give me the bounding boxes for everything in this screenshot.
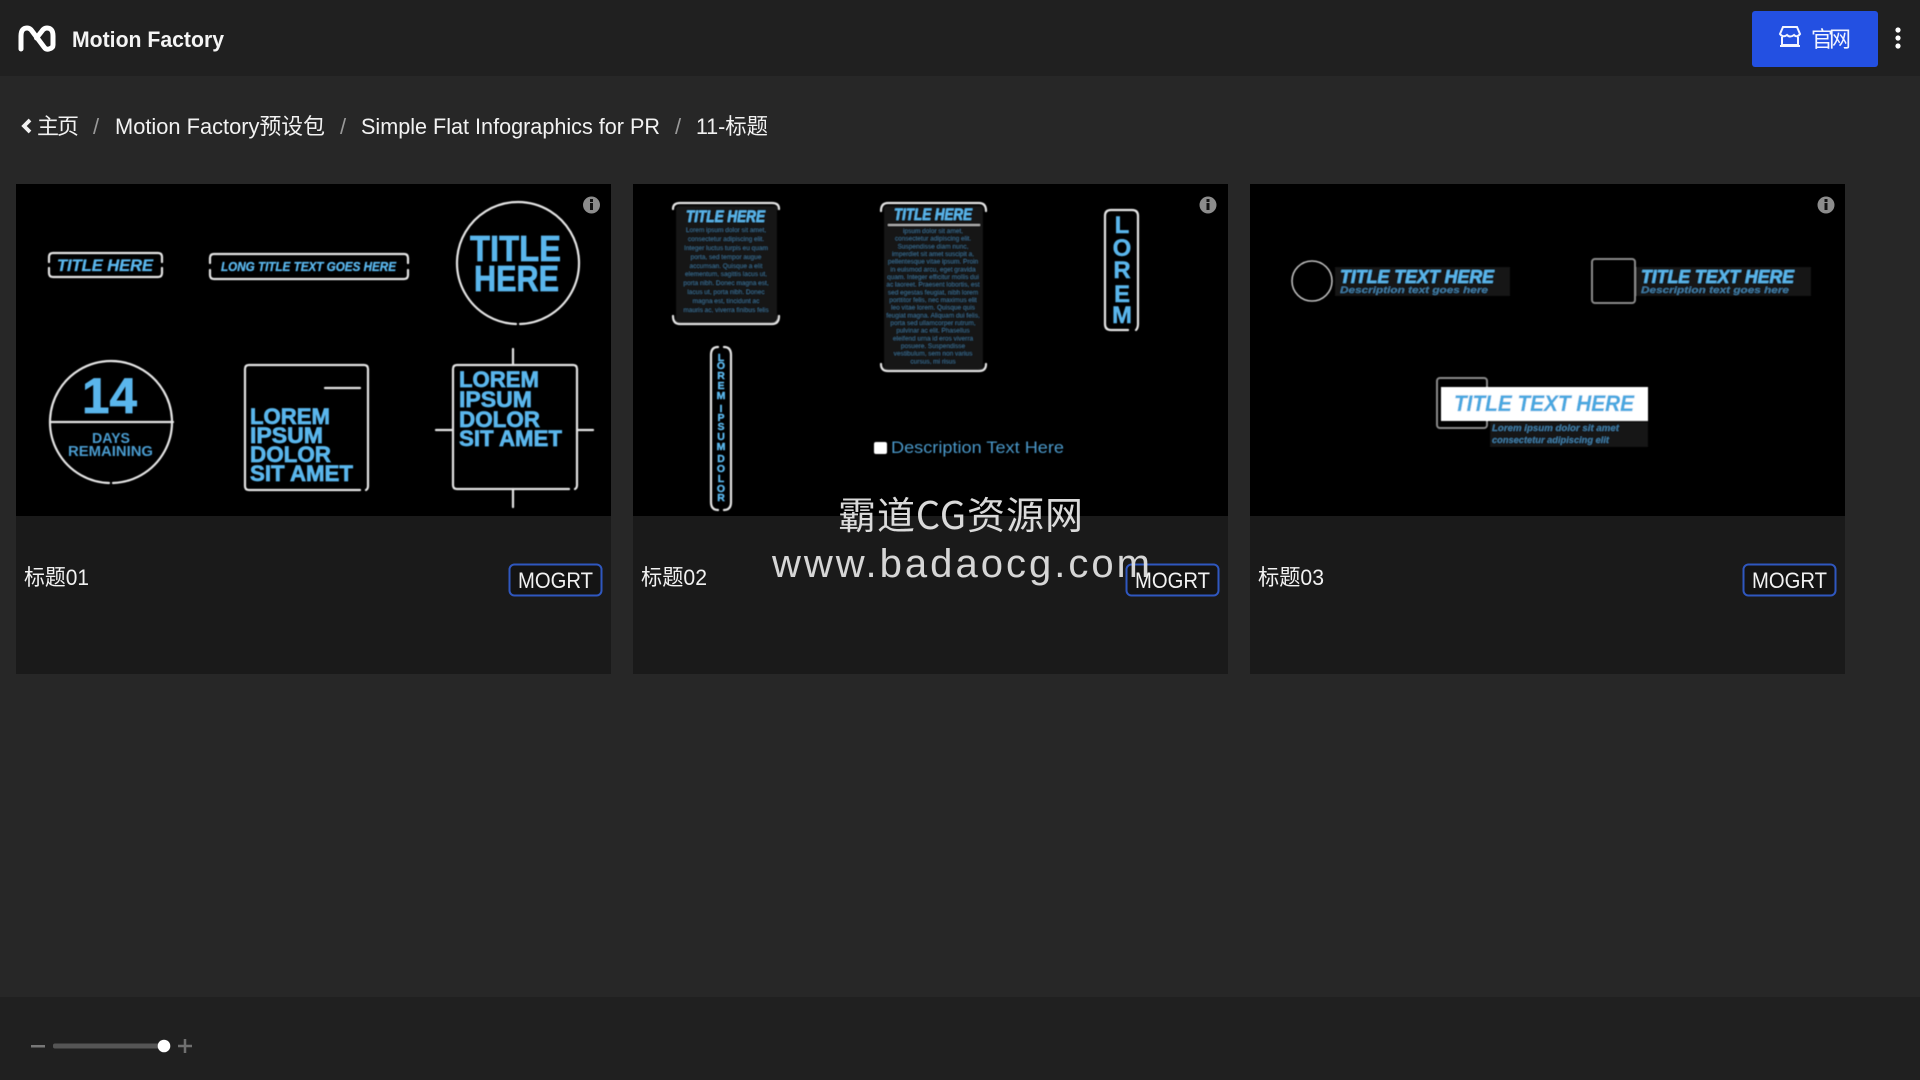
vertical lorem ipsum dolor box: O bbox=[717, 463, 725, 475]
boxed white title: Lorem ipsum dolor sit amet bbox=[1492, 423, 1620, 434]
title and paragraph box: consectetur adipiscing elit. bbox=[688, 236, 764, 243]
boxed white title: consectetur adipiscing elit bbox=[1492, 435, 1610, 446]
MOGRT tag: MOGRT bbox=[1752, 568, 1827, 593]
description line with square bullet: Description Text Here bbox=[891, 438, 1064, 457]
days remaining badge: DAYS bbox=[92, 431, 130, 447]
title and paragraph box: TITLE HERE bbox=[686, 207, 766, 226]
vertical lorem ipsum dolor box: E bbox=[717, 380, 725, 392]
circle title bbox=[1292, 261, 1510, 301]
brand name: Motion Factory bbox=[72, 27, 225, 52]
round title badge bbox=[457, 202, 579, 324]
watermark bbox=[771, 485, 1150, 586]
lorem box with crosshair ticks: LOREM bbox=[459, 367, 539, 392]
top navigation bar bbox=[0, 0, 1920, 76]
title and paragraph box: porta nibh. Donec magna est, bbox=[683, 280, 769, 287]
circle title: Description text goes here bbox=[1340, 285, 1489, 296]
title and long paragraph box: in euismod arcu, eget gravida bbox=[890, 266, 976, 273]
title and long paragraph box: pulvinar ac elit. Phasellus bbox=[896, 328, 970, 335]
title pill: TITLE HERE bbox=[57, 256, 154, 275]
title and long paragraph box bbox=[881, 203, 986, 371]
boxed white title: TITLE TEXT HERE bbox=[1454, 391, 1635, 416]
vertical lorem ipsum dolor box: O bbox=[717, 360, 725, 372]
slider track bbox=[53, 1044, 163, 1048]
title and long paragraph box: ac laoreet. Praesent lobortis, est bbox=[886, 282, 980, 289]
days remaining badge: 14 bbox=[82, 368, 137, 424]
title and paragraph box bbox=[673, 203, 779, 324]
lorem box lower text: DOLOR bbox=[250, 442, 331, 467]
vertical lorem ipsum dolor box: R bbox=[717, 492, 725, 504]
long title pill bbox=[210, 254, 408, 279]
thumbnail 3 bbox=[1250, 184, 1845, 516]
lorem box with crosshair ticks bbox=[436, 349, 593, 507]
title and long paragraph box: pellentesque vitae ipsum. Proin bbox=[888, 259, 979, 266]
title and long paragraph box: Suspendisse diam nunc, bbox=[898, 243, 969, 250]
square title: Description text goes here bbox=[1641, 285, 1790, 296]
card 3 label: 标题03 bbox=[1258, 565, 1324, 590]
vertical lorem ipsum dolor box: L bbox=[718, 473, 725, 485]
title pill bbox=[49, 253, 162, 277]
watermark: 霸道CG资源网 bbox=[838, 485, 1083, 540]
button label: 官网 bbox=[1811, 27, 1851, 52]
footer bar with zoom slider bbox=[0, 997, 1920, 1080]
days remaining badge bbox=[50, 361, 173, 483]
days remaining badge: REMAINING bbox=[68, 444, 153, 460]
breadcrumb navigation: Motion Factory预设包 bbox=[115, 114, 325, 139]
lorem box with crosshair ticks: SIT AMET bbox=[459, 426, 562, 451]
title and long paragraph box: posuere. Suspendisse bbox=[901, 343, 966, 350]
vertical lorem ipsum dolor box bbox=[711, 347, 731, 510]
round title badge: TITLE bbox=[470, 228, 561, 269]
vertical LOREM box: R bbox=[1113, 257, 1131, 284]
MOGRT tag: MOGRT bbox=[1135, 568, 1210, 593]
vertical lorem ipsum dolor box: M bbox=[717, 441, 726, 453]
breadcrumb navigation bbox=[24, 114, 768, 139]
title and paragraph box: Lorem ipsum dolor sit amet, bbox=[686, 227, 766, 234]
title and long paragraph box: cursus, mi risus bbox=[910, 358, 956, 365]
MOGRT tag: MOGRT bbox=[518, 568, 593, 593]
watermark: www.badaocg.com bbox=[771, 542, 1150, 586]
icon: zoom out bbox=[31, 1045, 45, 1048]
icon: info bbox=[1200, 196, 1216, 214]
title and long paragraph box: ipsum dolor sit amet, bbox=[903, 228, 963, 235]
title and long paragraph box: porttitor felis, nec maximus elit bbox=[889, 297, 977, 304]
official site button bbox=[1752, 11, 1878, 67]
title and paragraph box: mauris ac, viverra finibus felis bbox=[683, 307, 769, 314]
title and long paragraph box: porta sed ullamcorper rutrum, bbox=[890, 320, 976, 327]
boxed white title bbox=[1437, 378, 1648, 447]
breadcrumb navigation: 11-标题 bbox=[696, 114, 768, 139]
title and long paragraph box: quam. Integer efficitur mollis dui bbox=[887, 274, 979, 281]
vertical lorem ipsum dolor box: M bbox=[717, 390, 726, 402]
slider knob bbox=[158, 1040, 170, 1052]
vertical lorem ipsum dolor box: P bbox=[717, 412, 725, 424]
breadcrumb navigation: Simple Flat Infographics for PR bbox=[361, 114, 660, 139]
round title badge: HERE bbox=[474, 258, 559, 299]
lorem box lower text: SIT AMET bbox=[250, 461, 353, 486]
card 3: 标题03 bbox=[1250, 184, 1845, 674]
circle title: TITLE TEXT HERE bbox=[1340, 266, 1495, 287]
title and long paragraph box: leo vitae lorem. Quisque quis bbox=[891, 305, 976, 312]
thumbnail 1 bbox=[16, 184, 611, 516]
vertical lorem ipsum dolor box: R bbox=[717, 370, 725, 382]
card 2: 标题02 bbox=[633, 184, 1228, 674]
title and long paragraph box: eleifend urna id eros viverra bbox=[893, 335, 973, 342]
lorem box lower text: LOREM bbox=[250, 404, 330, 429]
title and long paragraph box: sed egestas feugiat, nibh lorem bbox=[888, 289, 978, 296]
icon: info bbox=[583, 196, 600, 214]
title and paragraph box: magna est, tincidunt ac bbox=[693, 298, 760, 305]
vertical lorem ipsum dolor box: U bbox=[717, 431, 725, 443]
thumbnail 2 bbox=[633, 184, 1228, 516]
breadcrumb navigation: / bbox=[675, 114, 682, 139]
title and paragraph box: lacus ut, porta nibh. Donec bbox=[687, 289, 765, 296]
title and long paragraph box: feugiat magna. Aliquam dui felis, bbox=[886, 312, 980, 319]
vertical LOREM box: L bbox=[1115, 212, 1129, 239]
title and long paragraph box: TITLE HERE bbox=[894, 205, 973, 224]
breadcrumb navigation: 主页 bbox=[37, 114, 79, 139]
title and paragraph box: porta, sed tempor augue bbox=[691, 254, 762, 261]
icon: Motion Factory logo bbox=[21, 28, 53, 49]
icon: info bbox=[1818, 196, 1834, 214]
icon: storefront bbox=[1780, 27, 1800, 46]
lorem box lower text bbox=[245, 365, 368, 490]
card 1: 标题01 bbox=[16, 184, 611, 674]
lorem box with crosshair ticks: DOLOR bbox=[459, 407, 540, 432]
vertical lorem ipsum dolor box: S bbox=[717, 421, 725, 433]
vertical lorem ipsum dolor box: D bbox=[717, 453, 725, 465]
title and paragraph box: Integer luctus turpis eu quam bbox=[684, 245, 768, 252]
vertical LOREM box: E bbox=[1114, 281, 1130, 308]
square title: TITLE TEXT HERE bbox=[1641, 266, 1795, 287]
square title bbox=[1592, 259, 1811, 303]
long title pill: LONG TITLE TEXT GOES HERE bbox=[221, 260, 397, 274]
vertical lorem ipsum dolor box: I bbox=[720, 403, 723, 415]
title and long paragraph box: consectetur adipiscing elit. bbox=[895, 236, 971, 243]
title and long paragraph box: imperdiet sit amet suscipit a, bbox=[892, 251, 974, 258]
icon: zoom in bbox=[178, 1039, 192, 1053]
icon: more menu bbox=[1895, 27, 1901, 49]
breadcrumb navigation: / bbox=[340, 114, 347, 139]
card 2 label: 标题02 bbox=[641, 565, 707, 590]
card 1 label: 标题01 bbox=[24, 565, 89, 590]
vertical LOREM box: M bbox=[1112, 302, 1132, 329]
vertical lorem ipsum dolor box: L bbox=[718, 352, 725, 364]
title and long paragraph box: vestibulum, sem non varius bbox=[894, 351, 973, 358]
lorem box lower text: IPSUM bbox=[250, 423, 323, 448]
title and paragraph box: accumsan. Quisque a elit bbox=[690, 263, 763, 270]
title and paragraph box: elementum, sagittis lacus ut, bbox=[685, 271, 767, 278]
vertical LOREM box: O bbox=[1113, 235, 1131, 262]
vertical lorem ipsum dolor box: O bbox=[717, 483, 725, 495]
vertical LOREM box bbox=[1105, 210, 1138, 330]
lorem box with crosshair ticks: IPSUM bbox=[459, 387, 532, 412]
breadcrumb navigation: / bbox=[93, 114, 100, 139]
